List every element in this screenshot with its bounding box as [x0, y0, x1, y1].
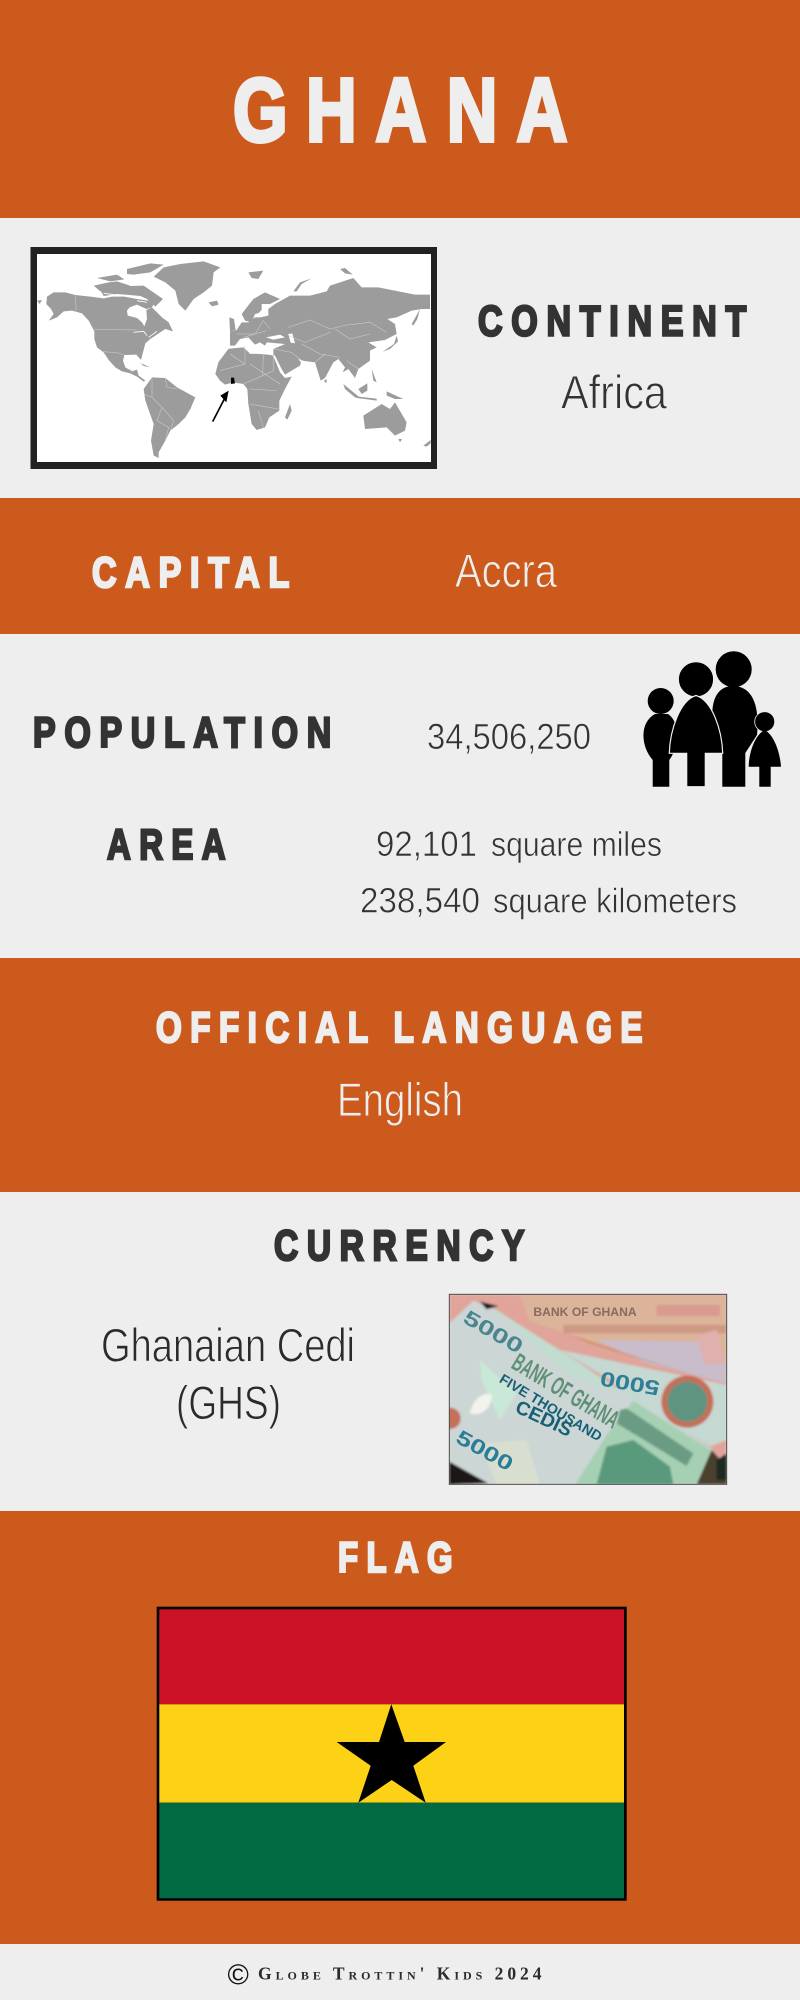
heading: capital: CAPITAL — [92, 549, 298, 597]
value: area in square miles — [376, 825, 662, 864]
text on banknote: 5000 — [452, 1426, 517, 1476]
value: Ghanaian Cedi (GHS) — [101, 1319, 355, 1429]
panel: official language — [0, 958, 800, 1192]
footer: copyright — [228, 1960, 546, 1992]
icon: family silhouette — [643, 651, 781, 787]
panel: population and area — [33, 651, 781, 921]
title: GHANA — [233, 61, 567, 161]
panel: capital — [0, 498, 800, 634]
text on banknote — [452, 1305, 662, 1476]
text on banknote: FIVE THOUSAND — [497, 1371, 605, 1444]
heading: currency: CURRENCY — [274, 1222, 533, 1270]
value: Accra: Accra — [455, 544, 558, 597]
value: area in square kilometers — [360, 882, 737, 921]
value: Ghanaian Cedi (GHS): (GHS) — [176, 1376, 281, 1429]
value: English: English — [337, 1073, 463, 1126]
world map with arrow to Ghana — [30, 247, 437, 469]
text on banknote: BANK OF GHANA — [533, 1305, 637, 1319]
footer: copyright: Globe Trottin' Kids 2024 — [258, 1964, 546, 1984]
header band — [0, 0, 800, 218]
value: population number: 34,506,250 — [427, 716, 591, 757]
value: area in square miles: 92,101 — [376, 825, 477, 864]
panel: currency — [101, 1222, 727, 1484]
value: area in square kilometers: 238,540 — [360, 882, 480, 921]
icon: black star — [337, 1704, 446, 1803]
value: area in square kilometers: square kilometers — [493, 883, 737, 921]
heading: official language: OFFICIAL LANGUAGE — [156, 1004, 651, 1052]
panel: flag — [0, 1511, 800, 1944]
value: area in square miles: square miles — [491, 826, 662, 864]
heading: population: POPULATION — [33, 709, 340, 757]
panel: continent — [30, 247, 755, 469]
image: Ghanaian banknotes — [439, 1294, 727, 1484]
heading: flag: FLAG — [338, 1534, 461, 1582]
heading: area: AREA — [107, 821, 234, 869]
text on banknote: 5000 — [459, 1306, 527, 1358]
footer: copyright: © — [228, 1960, 249, 1992]
text on banknote: CEDIS — [512, 1397, 575, 1442]
text on banknote: 5000 — [598, 1366, 662, 1399]
text on banknote: BANK OF GHANA — [507, 1348, 624, 1434]
value: Ghanaian Cedi (GHS): Ghanaian Cedi — [101, 1319, 355, 1372]
flag of Ghana — [157, 1607, 627, 1901]
value: Africa: Africa — [561, 366, 668, 418]
